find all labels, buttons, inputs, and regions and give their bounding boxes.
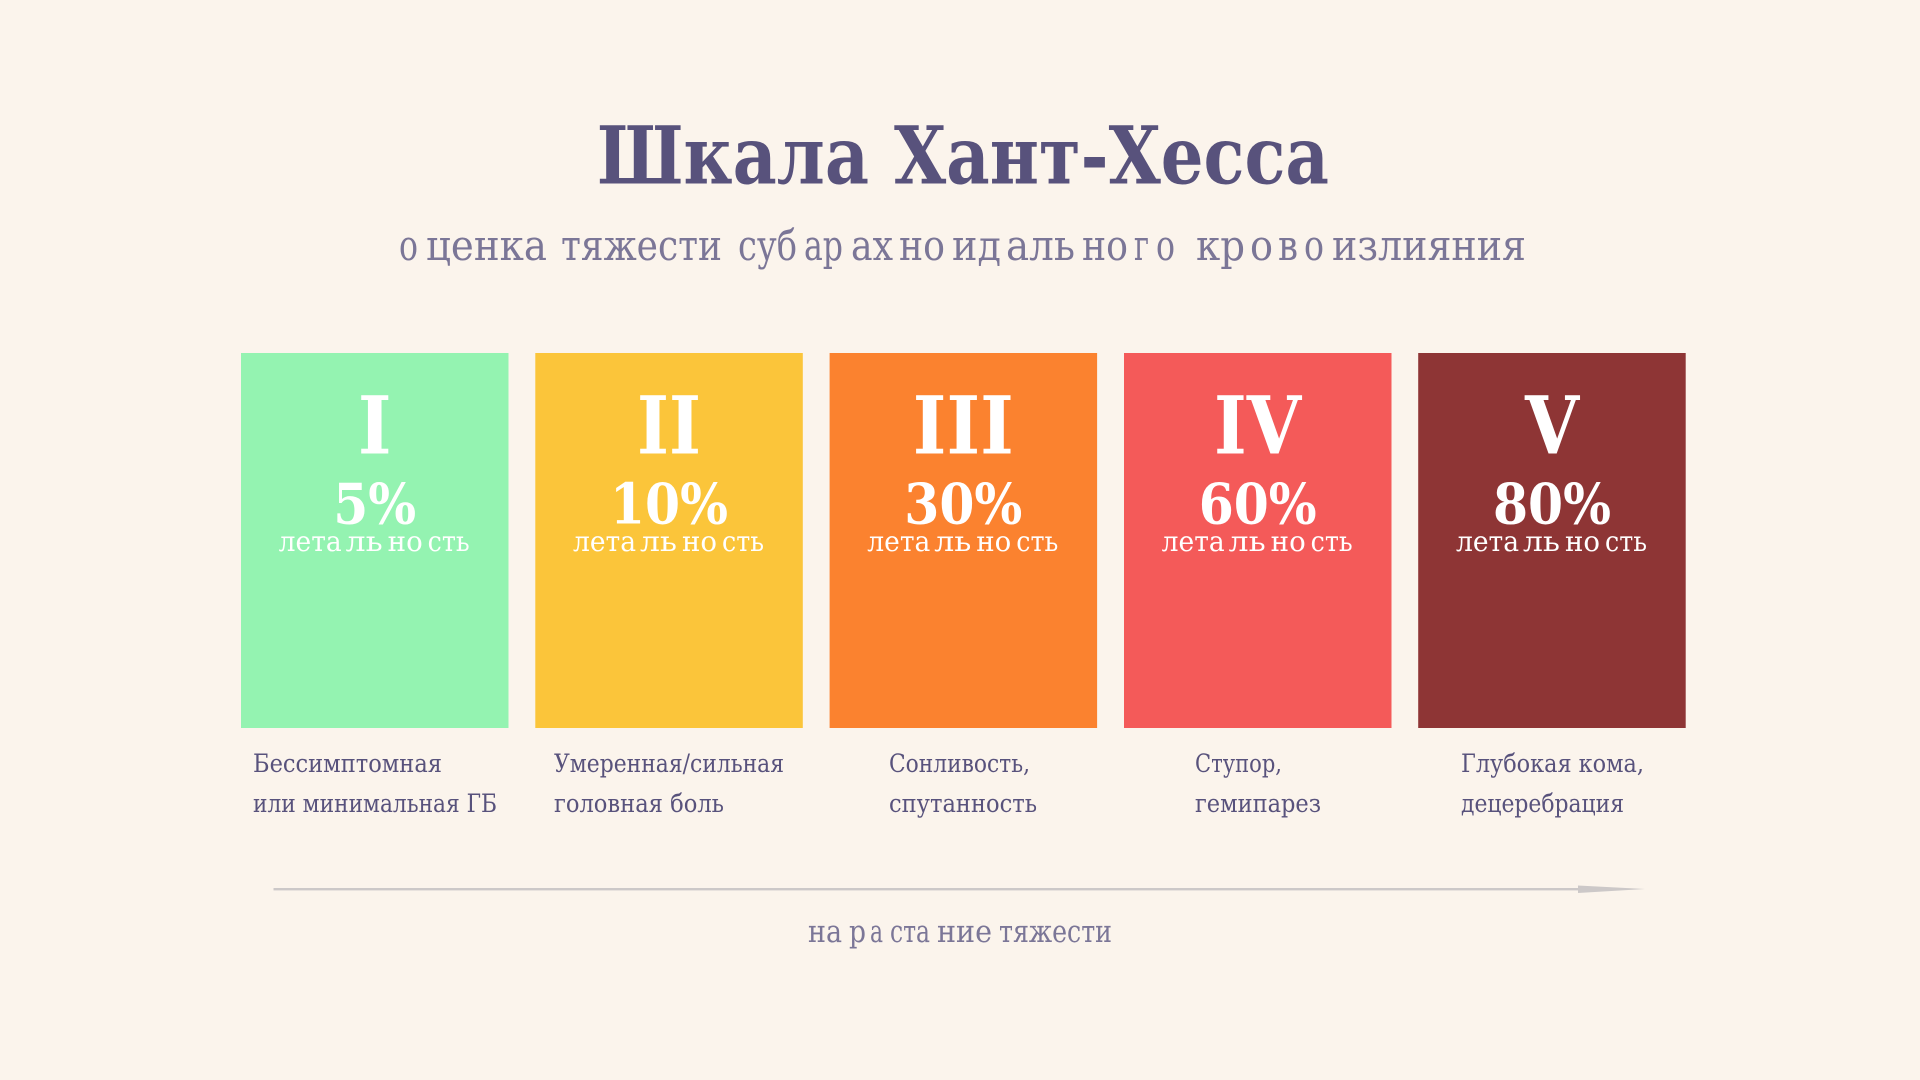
subtitle: аль (1006, 221, 1075, 270)
panel: grade III: III (913, 378, 1014, 472)
description: grade III: Сонливость, (889, 749, 1030, 778)
panel: grade III: сть (1016, 525, 1058, 558)
subtitle: ар (804, 221, 843, 270)
subtitle: в (1278, 221, 1298, 270)
description: grade II: головная боль (554, 789, 724, 818)
subtitle: о (1156, 221, 1175, 270)
panel: grade V: лета (1456, 525, 1519, 558)
panel: grade III: но (976, 525, 1011, 558)
panel: grade V: 80% (1493, 472, 1611, 538)
description: grade I (253, 749, 497, 818)
subtitle: излияния (1332, 221, 1526, 270)
caption: increasing severity: на (808, 914, 842, 950)
title: Хант-Хесса (894, 108, 1329, 202)
caption: increasing severity: ста (890, 914, 930, 950)
title (597, 108, 1329, 202)
panel: grade III: ль (934, 525, 971, 558)
panel: grade II: 10% (610, 472, 728, 538)
subtitle: но (899, 221, 945, 270)
description: grade V: децеребрация (1461, 789, 1624, 818)
panel: grade I (241, 353, 508, 728)
subtitle: г (1134, 221, 1149, 270)
description: grade I: или минимальная ГБ (253, 789, 497, 818)
subtitle: суб (738, 221, 797, 270)
caption: increasing severity: ние (937, 914, 992, 950)
panel: grade I: 5% (333, 472, 416, 538)
caption: increasing severity: а (870, 914, 883, 950)
subtitle: ах (851, 221, 893, 270)
description: grade IV: гемипарез (1195, 789, 1321, 818)
panel: grade I: I (358, 378, 392, 472)
panel: grade IV (1124, 353, 1392, 728)
panel: grade IV: сть (1311, 525, 1353, 558)
panel: grade V: но (1565, 525, 1600, 558)
description: grade V (1461, 749, 1644, 818)
panel: grade I: ль (346, 525, 383, 558)
panel: grade II: но (682, 525, 717, 558)
description: grade III (889, 749, 1037, 818)
panel: grade IV: 60% (1199, 472, 1317, 538)
subtitle (399, 221, 1526, 270)
description: grade V: Глубокая кома, (1461, 749, 1644, 778)
panel: grade I: лета (279, 525, 342, 558)
caption: increasing severity: р (849, 914, 866, 950)
panel: grade II: сть (722, 525, 764, 558)
panel: grade I: сть (428, 525, 470, 558)
description: grade I: Бессимптомная (253, 749, 442, 778)
panel: grade II (535, 353, 803, 728)
panel: grade IV: но (1271, 525, 1306, 558)
description: grade II (554, 749, 784, 818)
subtitle: ценка (426, 221, 547, 270)
panel: grade III (830, 353, 1097, 728)
subtitle: ид (952, 221, 1001, 270)
panel: grade III: 30% (904, 472, 1022, 538)
caption: increasing severity: тяжести (999, 914, 1112, 950)
panel: grade II: лета (573, 525, 636, 558)
subtitle: кр (1196, 221, 1245, 270)
panel: grade V: ль (1523, 525, 1560, 558)
description: grade III: спутанность (889, 789, 1037, 818)
description: grade II: Умеренная/сильная (554, 749, 784, 778)
panel: grade II: ль (640, 525, 677, 558)
arrow: increasing severity (274, 886, 1645, 893)
panel: grade V: сть (1605, 525, 1647, 558)
panel: grade IV: лета (1162, 525, 1225, 558)
panel: grade IV: ль (1229, 525, 1266, 558)
panel: grade III: лета (867, 525, 930, 558)
title: Шкала (597, 108, 869, 202)
description: grade IV: Ступор, (1195, 749, 1282, 778)
subtitle: о (1304, 221, 1324, 270)
panel: grade IV: IV (1214, 378, 1302, 472)
caption: increasing severity (808, 914, 1112, 950)
panel: grade V (1418, 353, 1686, 728)
subtitle: но (1082, 221, 1128, 270)
description: grade IV (1195, 749, 1321, 818)
subtitle: о (1250, 221, 1273, 270)
panel: grade II: II (637, 378, 701, 472)
panel: grade V: V (1524, 378, 1580, 472)
panel: grade I: но (388, 525, 423, 558)
subtitle: о (399, 221, 418, 270)
subtitle: тяжести (561, 221, 722, 270)
